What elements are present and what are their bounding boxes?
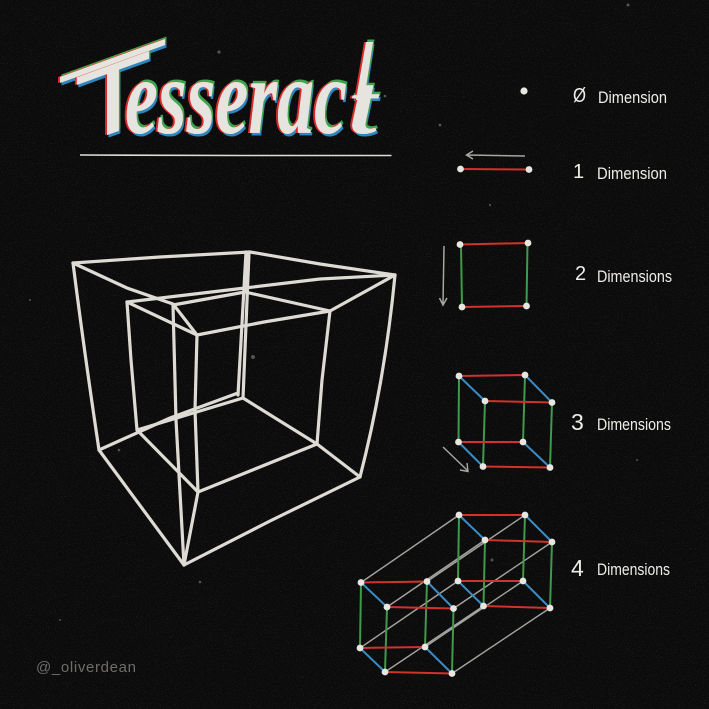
4 dimensions: tesseract diagram [357,512,555,677]
label: 0 dimension: Dimension [598,89,667,107]
label: 0 dimension: Ø [573,85,586,107]
title: Tesseract: esserac [125,38,347,157]
1 dimension: line [457,166,532,173]
label: 4 dimensions: Dimensions [597,561,670,579]
label: 3 dimensions: Dimensions [597,416,671,434]
2 dimensions: arrow [440,246,447,305]
label: 1 dimension: Dimension [597,165,667,183]
1 dimension: arrow [466,151,525,159]
label: 3 dimensions: 3 [571,409,584,435]
label: 1 dimension [573,161,667,183]
title: Tesseract: t [349,58,380,152]
label: 2 dimensions: 2 [575,263,586,285]
label: 4 dimensions: 4 [571,555,584,581]
tesseract large drawing [73,252,395,565]
title underline [80,154,392,156]
0 dimension: point [520,87,528,95]
label: 2 dimensions [575,263,672,286]
label: 1 dimension: 1 [573,161,584,183]
label: 2 dimensions: Dimensions [597,268,672,286]
label: 3 dimensions [571,409,671,435]
3 dimensions: cube [455,372,555,471]
credit: handle: @_oliverdean [36,659,136,676]
label: 0 dimension [573,85,667,107]
2 dimensions: square [457,240,531,310]
title: Tesseract [60,29,380,169]
label: 4 dimensions [571,555,670,581]
title: Tesseract: T [74,29,152,169]
3 dimensions: arrow [443,447,468,472]
